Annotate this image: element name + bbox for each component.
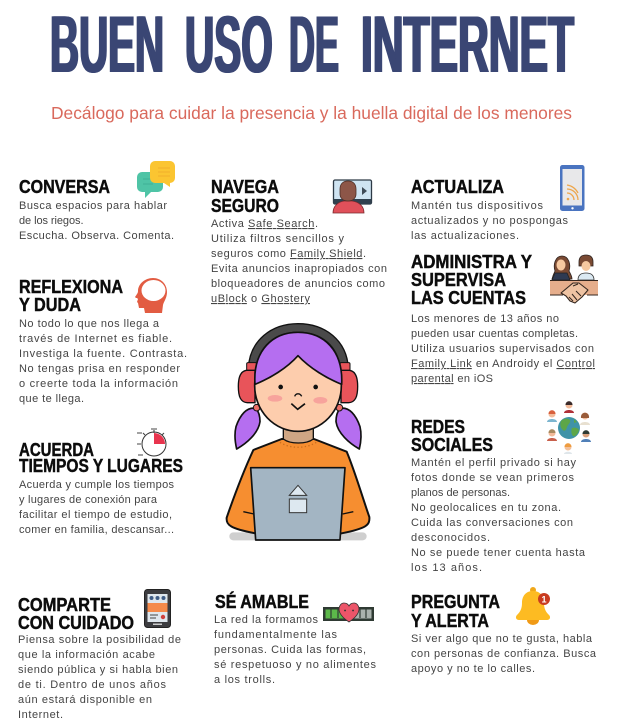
text: comparte con cuidado: siendo pública y si habla bien — [18, 664, 178, 676]
text: reflexiona y duda: que te llega. — [19, 393, 84, 405]
icon: video viewer — [333, 180, 372, 213]
panel: navega seguro — [211, 177, 387, 305]
icon: bell — [516, 587, 550, 625]
text: reflexiona y duda — [19, 318, 187, 405]
text: navega seguro — [211, 218, 387, 305]
heading: conversa: CONVERSA — [19, 177, 110, 197]
neck — [283, 428, 313, 443]
panel: redes sociales — [411, 401, 591, 574]
text: se amable: La red la formamos — [214, 614, 318, 626]
panel: conversa — [19, 161, 175, 242]
text: se amable: fundamentalmente las — [214, 629, 338, 641]
text: comparte con cuidado: Piensa sobre la posibilidad de — [18, 634, 181, 646]
text: conversa — [19, 200, 174, 242]
text: reflexiona y duda: Investiga la fuente. Contrasta. — [19, 348, 187, 360]
heading: acuerda tiempos y lugares — [19, 440, 183, 476]
text: navega seguro: Utiliza filtros sencillos y — [211, 233, 344, 245]
text: navega seguro: seguros como Family Shield. — [211, 248, 366, 260]
heading: navega seguro: NAVEGA — [211, 177, 279, 197]
heading: administra y supervisa las cuentas: SUPERVISA — [411, 270, 506, 290]
icon: globe with people — [547, 401, 591, 454]
text: actualiza: Mantén tus dispositivos — [411, 200, 544, 212]
title: DE — [289, 0, 339, 90]
title: USO — [184, 0, 272, 90]
icon: heart meter — [323, 603, 374, 622]
text: reflexiona y duda: o creerte toda la información — [19, 378, 178, 390]
heading: reflexiona y duda: REFLEXIONA — [19, 277, 123, 297]
text: redes sociales: los 13 años. — [411, 562, 482, 574]
text: conversa: de los riegos. — [19, 215, 84, 227]
text: administra y supervisa las cuentas: Utiliza usuarios supervisados con — [411, 343, 594, 355]
heading: redes sociales — [411, 417, 493, 455]
icon: phone with profile — [144, 590, 170, 628]
text: redes sociales: desconocidos. — [411, 532, 490, 544]
panel: administra y supervisa las cuentas — [411, 252, 598, 385]
text: acuerda tiempos y lugares: y lugares de conexión para — [19, 494, 158, 506]
panel: reflexiona y duda — [19, 277, 187, 405]
panel: se amable — [214, 591, 376, 686]
text: navega seguro: Evita anuncios inapropiados con — [211, 263, 387, 275]
text: comparte con cuidado: de ti. Dentro de unos años — [18, 679, 166, 691]
text: administra y supervisa las cuentas: parental en iOS — [411, 373, 493, 385]
heading: acuerda tiempos y lugares: TIEMPOS Y LUGARES — [19, 456, 183, 476]
text: pregunta y alerta: con personas de confianza. Busca — [411, 648, 597, 660]
text: se amable: personas. Cuida las formas, — [214, 644, 366, 656]
text: acuerda tiempos y lugares: Acuerda y cumple los tiempos — [19, 479, 174, 491]
text: actualiza — [411, 200, 568, 242]
text: se amable — [214, 614, 376, 686]
heading: pregunta y alerta — [411, 592, 500, 631]
text: redes sociales: Mantén el perfil privado si hay — [411, 457, 576, 469]
text: pregunta y alerta: apoyo y no te lo calles. — [411, 663, 535, 675]
icon: smartphone with wifi — [560, 165, 584, 211]
heading: se amable: SÉ AMABLE — [215, 591, 309, 612]
text: redes sociales: fotos donde se vean primeros — [411, 472, 574, 484]
text: reflexiona y duda: No todo lo que nos llega a — [19, 318, 160, 330]
heading: administra y supervisa las cuentas — [411, 252, 532, 308]
heading: comparte con cuidado — [18, 595, 134, 633]
laptop — [251, 468, 345, 540]
title — [50, 0, 575, 90]
icon: head — [135, 278, 167, 313]
panel: actualiza — [411, 165, 584, 242]
text: actualiza: actualizados y no pospongas — [411, 215, 568, 227]
heading: actualiza: ACTUALIZA — [411, 177, 504, 197]
text: acuerda tiempos y lugares: comer en familia, descansar... — [19, 524, 174, 536]
icon: bell: 1 — [541, 594, 547, 604]
heading: reflexiona y duda — [19, 277, 123, 315]
facial features — [278, 385, 283, 389]
heading: pregunta y alerta: Y ALERTA — [411, 611, 489, 631]
headphones band — [253, 328, 344, 398]
hair — [255, 332, 342, 384]
heading: administra y supervisa las cuentas: ADMINISTRA Y — [411, 252, 532, 272]
text: redes sociales — [411, 457, 586, 574]
heading: redes sociales: REDES — [411, 417, 465, 437]
text: acuerda tiempos y lugares — [19, 479, 174, 536]
text: se amable: a los trolls. — [214, 674, 275, 686]
panel: pregunta y alerta — [411, 587, 597, 675]
panel: comparte con cuidado — [18, 590, 181, 721]
face — [255, 340, 341, 431]
text: navega seguro: uBlock o Ghostery — [211, 293, 310, 305]
text: comparte con cuidado: aún estará disponible en — [18, 694, 152, 706]
heading: pregunta y alerta: PREGUNTA — [411, 592, 500, 612]
text: redes sociales: Cuida las conversaciones con — [411, 517, 573, 529]
icon: handshake between two people — [550, 255, 598, 303]
text: comparte con cuidado — [18, 634, 181, 721]
icon: stopwatch — [137, 429, 166, 456]
text: administra y supervisa las cuentas: pueden usar cuentas completas. — [411, 328, 578, 340]
heading: redes sociales: SOCIALES — [411, 435, 493, 455]
text: navega seguro: bloqueadores de anuncios como — [211, 278, 385, 290]
text: reflexiona y duda: No tengas prisa en responder — [19, 363, 180, 375]
text: pregunta y alerta: Si ver algo que no te gusta, habla — [411, 633, 593, 645]
heading: reflexiona y duda: Y DUDA — [19, 295, 81, 315]
text: administra y supervisa las cuentas: Family Link en Androidy el Control — [411, 358, 595, 370]
icon: chat bubbles — [137, 161, 175, 198]
illustration: girl with laptop — [227, 328, 369, 540]
title: BUEN — [50, 0, 164, 90]
text: pregunta y alerta — [411, 633, 597, 675]
heading: comparte con cuidado: CON CUIDADO — [18, 613, 134, 633]
panel: acuerda tiempos y lugares — [19, 429, 183, 536]
heading: acuerda tiempos y lugares: ACUERDA — [19, 440, 94, 460]
pigtails — [235, 408, 260, 449]
text: actualiza: las actualizaciones. — [411, 230, 519, 242]
text: reflexiona y duda: través de Internet es fiable. — [19, 333, 172, 345]
text: navega seguro: Activa Safe Search. — [211, 218, 318, 230]
heading: comparte con cuidado: COMPARTE — [18, 595, 111, 615]
heading: administra y supervisa las cuentas: LAS CUENTAS — [411, 288, 526, 308]
text: acuerda tiempos y lugares: facilitar el tiempo de estudio, — [19, 509, 172, 521]
text: redes sociales: No se puede tener cuenta hasta — [411, 547, 586, 559]
text: comparte con cuidado: Internet. — [18, 709, 63, 721]
subtitle: Decálogo para cuidar la presencia y la huella digital de los menores — [51, 103, 572, 123]
sweater — [227, 439, 369, 533]
text: se amable: sé respetuoso y no alimentes — [214, 659, 376, 671]
ear cups — [247, 363, 257, 371]
text: administra y supervisa las cuentas: Los menores de 13 años no — [411, 313, 559, 325]
text: conversa: Busca espacios para hablar — [19, 200, 167, 212]
title: INTERNET — [361, 0, 574, 90]
text: redes sociales: No geolocalices en tu zona. — [411, 502, 561, 514]
text: administra y supervisa las cuentas — [411, 313, 595, 385]
text: conversa: Escucha. Observa. Comenta. — [19, 230, 174, 242]
heading: navega seguro: SEGURO — [211, 196, 279, 216]
heading: navega seguro — [211, 177, 279, 216]
text: comparte con cuidado: que la información acabe — [18, 649, 155, 661]
text: redes sociales: planos de personas. — [411, 487, 510, 499]
